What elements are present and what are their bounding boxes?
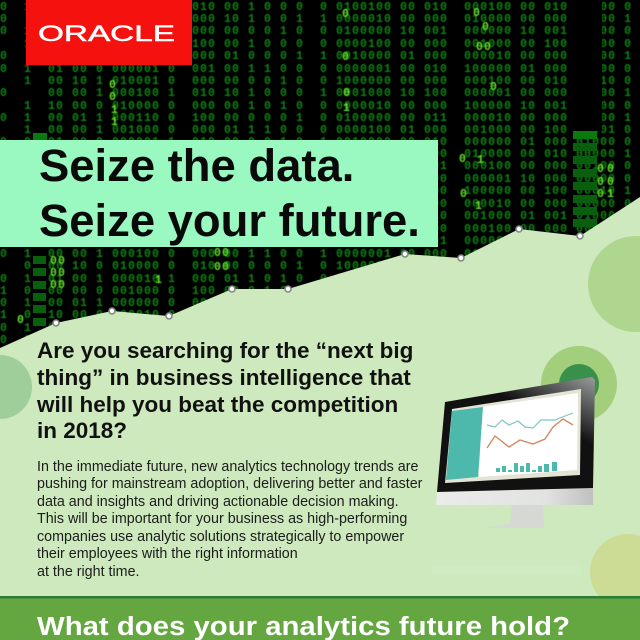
binary matrix background: 1 0 10 00 0 100010 0 010 00 0 0 1 0 0 0000100 00 001 001000 00 010 00100 0 10 [0,309,640,322]
light green hill area [0,197,640,640]
bright binary digits: 0 [459,153,466,166]
bright binary digits: 0 [342,51,349,64]
dashboard bar chart [496,462,557,472]
bright binary digits: 0 [607,163,614,176]
bright binary digits: 0 [50,279,57,292]
bright binary digits: 0 [460,188,467,201]
bright binary digits: 0 [17,314,24,327]
title banner: Seize the data. [39,140,354,191]
dense green data bars [33,131,597,326]
bright binary digits: 1 [155,274,162,287]
body paragraph: at the right time. [37,564,140,580]
bright binary digits: 0 [597,176,604,189]
bright binary digits: 0 [484,41,491,54]
bright binary digits: 0 [109,79,116,92]
binary matrix background: 0 1 00 01 1 000000 0 000 10 1 0 0 1 1 0100000 00 000 000001 00 000 00000 1 00 [0,297,640,310]
bright binary digits: 0 [109,91,116,104]
subheading question: will help you beat the competition [36,392,398,417]
binary matrix background: 1 00 00 1 001000 0 000 01 1 1 0 0 0 0000100 01 000 001000 00 100 00001 0 01 [0,124,640,137]
binary matrix background: 1 0 00 00 0 001000 0 100 00 0 1 0 0 0 0000010 10 010 000100 01 001 00010 0 01 [0,285,640,298]
bright binary digits: 1 [111,104,118,117]
binary matrix background: 0 0 01 00 0 010000 0 100 01 0 0 0 1 1 0000001 00 100 100000 00 100 01000 1 01 [0,334,640,347]
binary matrix background: 0 00 00 1 010000 0 000 01 0 0 0 1 1 0010000 01 000 000010 00 000 00000 1 00 [0,50,640,63]
title banner: Seize your future. [39,195,420,246]
bright binary digits: 0 [473,7,480,20]
binary matrix background [0,1,640,347]
monitor bezel [437,377,595,492]
body paragraph: companies use analytic solutions strategically to empower [37,529,404,545]
bright binary digits: 0 [597,188,604,201]
binary matrix background: 1 10 00 0 010000 0 000 00 1 0 1 0 0 0000010 00 000 100000 10 001 00000 0 10 [0,100,640,113]
bright binary digits: 0 [58,267,65,280]
bright binary digits: 0 [214,261,221,274]
binary matrix background: 0 1 00 00 1 000100 0 010 00 1 0 0 0 0 0100100 00 010 000100 00 010 00100 0 00 [0,1,640,14]
bright binary digits: 0 [50,255,57,268]
teal line chart [487,413,573,428]
bright binary digits: 0 [222,247,229,260]
footer band [0,596,640,640]
body paragraph: This will be important for your business as high-performing [37,511,407,527]
monitor screen [445,389,581,483]
binary matrix background: 0 00 00 1 000100 1 010 10 1 0 0 0 1 0001000 10 100 000001 00 000 00100 1 00 [0,87,640,100]
bright binary digits: 0 [343,87,350,100]
binary matrix background: 0 1 00 10 1 000100 1 000 00 1 1 0 0 0 0010000 01 000 000010 10 000 00000 0 00 [0,322,640,335]
monitor illustration [432,377,595,575]
body paragraph: data and insights and driving actionable decision making. [37,494,399,510]
hill data points [53,226,583,326]
bright binary digits: 0 [476,41,483,54]
subheading question [36,338,413,443]
binary matrix background: 1 01 00 1 100000 0 000 01 1 0 0 0 0 0000010 00 000 000010 00 000 00000 0 10 [0,198,640,211]
bright binary digits: 0 [482,21,489,34]
bright binary digits: 0 [222,261,229,274]
binary matrix background: 0 1 10 00 0 001000 1 000 00 0 0 1 0 0 0100000 10 001 000000 10 001 00000 0 00 [0,25,640,38]
body paragraph: their employees with the right information [37,546,298,562]
binary matrix background: 1 00 01 1 000100 0 100 00 1 0 0 0 0 0000100 00 000 001000 00 100 10000 0 10 [0,38,640,51]
bright binary digits: 0 [607,176,614,189]
dashboard sidebar [446,407,483,480]
binary matrix background: 0 0 01 00 0 000001 1 010 00 0 0 1 0 1 0010000 00 010 000000 01 000 01000 0 00 [0,136,640,149]
bright binary digits: 0 [597,163,604,176]
monitor stand [483,505,545,528]
binary matrix background: 0 0 00 10 0 000100 0 001 00 0 1 0 1 1 0100000 00 010 001000 01 001 01000 0 00 [0,210,640,223]
bright binary digits: 0 [58,255,65,268]
subheading question: thing” in business intelligence that [37,365,411,390]
decorative circle bottom right [590,534,640,610]
binary matrix background: 0 1 01 00 0 000001 0 001 00 1 1 0 0 0 0000001 00 010 100000 01 000 01000 0 01 [0,63,640,76]
monitor reflection [432,565,582,575]
title banner [0,140,438,247]
bright binary digits: 0 [50,267,57,280]
decorative concentric circles behind monitor [541,346,617,422]
binary matrix background: 1 00 10 1 010001 0 000 00 0 0 1 0 0 1000000 00 000 000100 00 010 00010 0 00 [0,75,640,88]
binary matrix background: 0 10 00 0 000100 0 100 10 0 0 0 1 0 1000000 00 001 000100 00 000 00100 0 00 [0,160,640,173]
binary matrix background: 0 1 00 01 1 001000 1 000 00 1 1 0 0 1 0000100 00 000 000001 10 000 00000 0 01 [0,173,640,186]
binary matrix background: 1 00 00 1 010000 1 000 00 1 0 0 0 0 0000100 10 000 000100 00 000 00001 1 00 [0,223,640,236]
subheading question: Are you searching for the “next big [37,338,413,363]
binary matrix background: 0 1 00 00 1 000100 0 000 00 1 1 0 0 1 0000001 00 000 010000 10 000 00100 0 00 [0,248,640,261]
bright binary digits: 0 [214,247,221,260]
subheading question: in 2018? [37,418,127,443]
logo: Oracle [26,0,192,65]
binary matrix background: 0 1 00 10 1 010000 0 000 00 1 0 0 0 0 0000001 10 000 010000 00 010 00000 1 10 [0,148,640,161]
bright binary digits: 1 [111,116,118,129]
binary matrix background: 0 00 00 1 000000 0 000 10 1 0 0 1 1 0000010 00 000 010000 00 000 00000 1 01 [0,13,640,26]
monitor chin [436,486,593,505]
binary matrix background: 0 00 10 0 010000 0 010 00 0 0 0 1 0 1000000 01 100 000010 00 100 00000 1 10 [0,260,640,273]
body paragraph [37,459,423,580]
orange line chart [487,419,573,448]
binary matrix background: 0 1 01 00 1 000010 1 000 01 1 0 1 0 0 0001000 00 000 100000 00 000 10000 0 00 [0,273,640,286]
binary matrix background: 0 0 00 00 0 000010 0 010 00 0 0 1 0 0 0010000 01 100 100000 00 100 00010 1 00 [0,185,640,198]
binary matrix background: 0 0 10 01 0 000001 0 100 10 0 0 1 0 0 0010000 00 001 000000 00 010 00000 0 01 [0,235,640,248]
decorative circle right [588,236,640,332]
bright binary digits: 1 [477,154,484,167]
logo: Oracle: ORACLE [38,21,175,46]
bright binary digits: 1 [343,102,350,115]
bright binary digits: 0 [58,279,65,292]
bright binary digits: 1 [475,200,482,213]
bright binary digits: 1 [607,188,614,201]
binary matrix background: 0 1 00 01 1 000110 0 100 00 0 0 0 1 0 0100000 00 011 000010 00 000 10000 1 00 [0,112,640,125]
bright binary digits [17,7,614,327]
body paragraph: In the immediate future, new analytics technology trends are [37,459,419,475]
body paragraph: pushing for mainstream adoption, delivering better and faster [37,476,423,492]
bright binary digits: 0 [342,8,349,21]
bright binary digits: 0 [490,81,497,94]
dark matrix column gap [572,0,602,131]
decorative circle left [0,355,32,419]
